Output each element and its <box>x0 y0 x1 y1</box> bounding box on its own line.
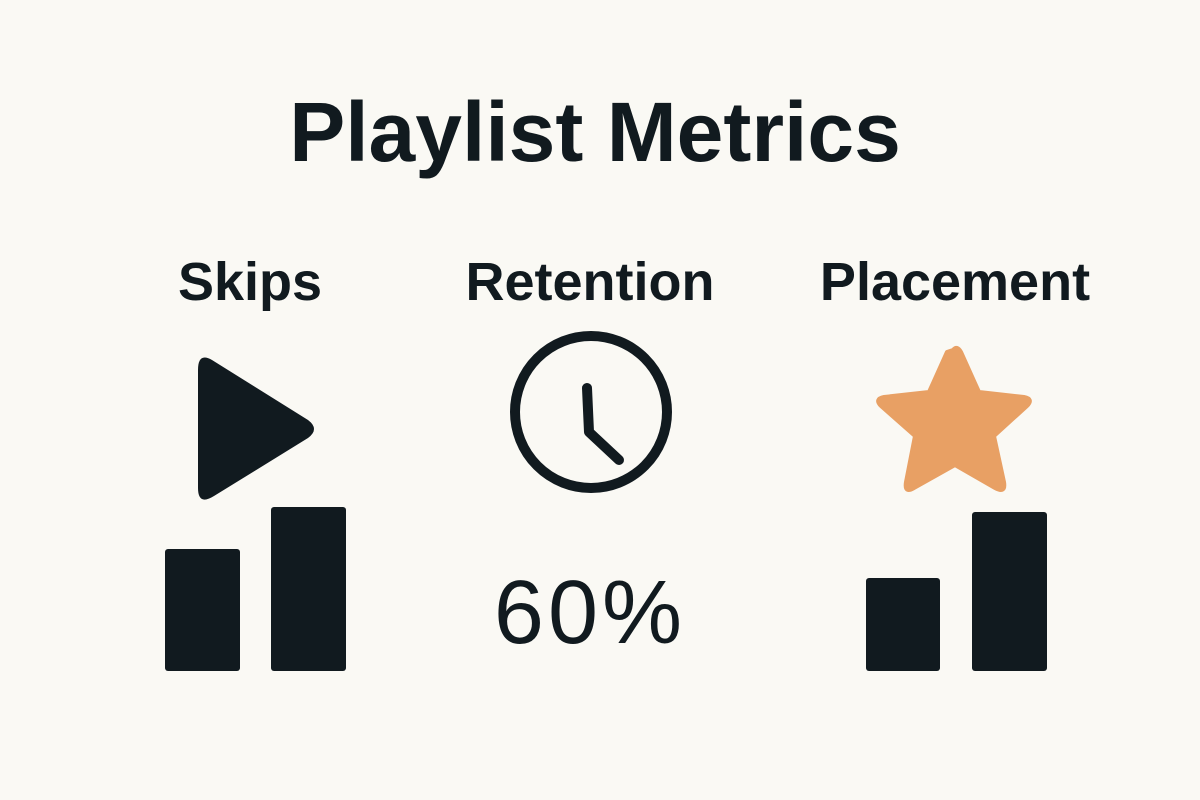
heading: placement: Placement <box>820 252 1090 312</box>
bar chart: placement <box>866 512 1047 671</box>
bar chart: skips <box>165 507 346 671</box>
heading: skips: Skips <box>178 252 322 312</box>
icon: star <box>878 348 1030 490</box>
icon: clock <box>515 336 667 488</box>
title: Playlist Metrics <box>289 85 901 179</box>
icon: play triangle <box>198 358 314 500</box>
heading: retention: Retention <box>466 252 714 312</box>
value: 60%: 60% <box>494 563 686 663</box>
